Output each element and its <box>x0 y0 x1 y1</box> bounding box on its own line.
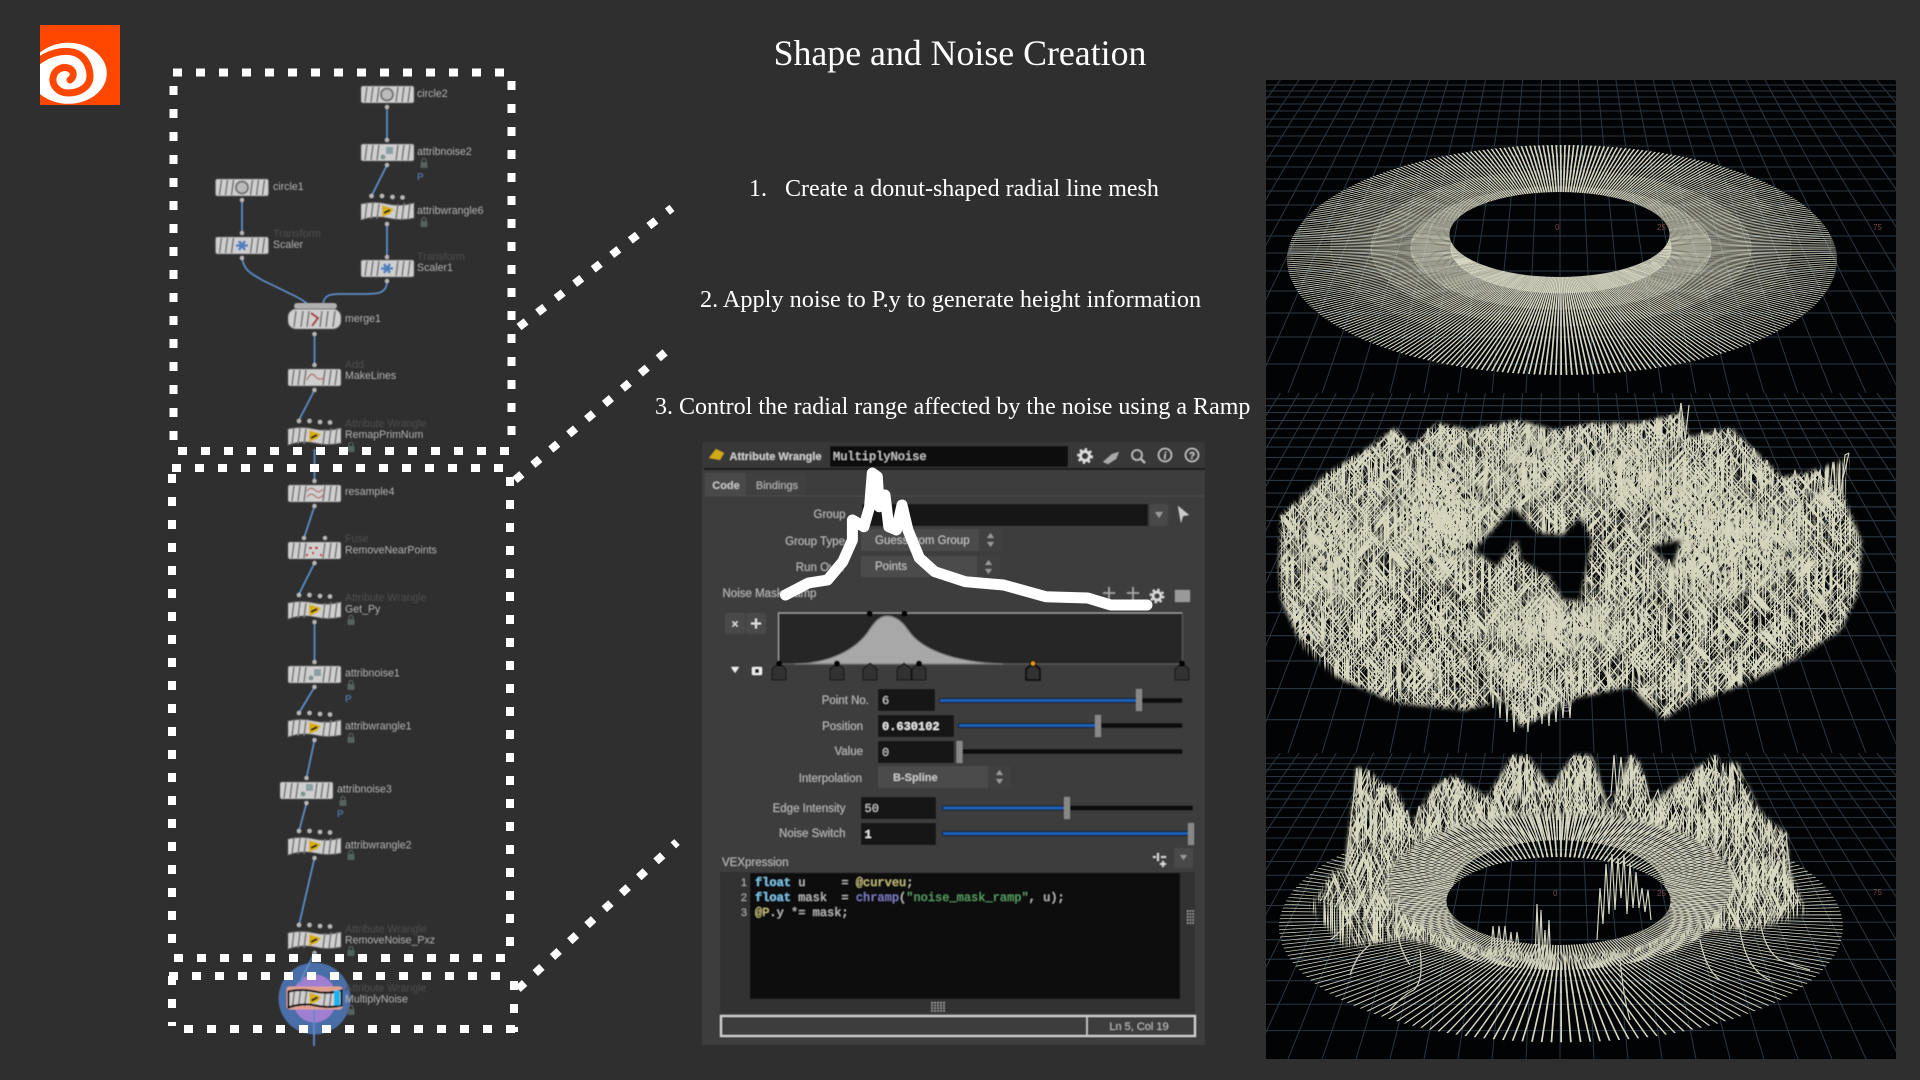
interpolation dropdown: Interpolation <box>799 773 862 785</box>
node: attribnoise2: P <box>417 172 424 183</box>
point no slider: 6 <box>882 694 889 708</box>
run over row: Run Over <box>796 562 845 574</box>
node: attribwrangle2 <box>288 829 412 860</box>
noise switch slider: 1 <box>864 828 872 842</box>
vexpression editor: @P.y *= mask; <box>755 906 849 920</box>
header row: ? <box>1189 451 1195 462</box>
vexpression editor: VEXpression <box>722 857 788 869</box>
node: attribnoise2 <box>361 138 472 183</box>
vexpression editor: float u = @curveu; <box>755 876 913 890</box>
node: MultiplyNoise selected: Attribute Wrangle <box>345 982 427 994</box>
dashed connector 2 <box>515 344 675 480</box>
node: attribnoise1: attribnoise1 <box>345 668 400 680</box>
node: attribnoise2: attribnoise2 <box>417 146 472 158</box>
node: attribnoise1 <box>288 660 400 705</box>
position slider <box>822 715 1182 737</box>
panel: viewport backdrop <box>1266 80 1896 1059</box>
group type row <box>785 529 1002 551</box>
value slider: 0 <box>882 746 889 760</box>
viewport: masked noise donut <box>1266 752 1896 1059</box>
viewport: flat donut <box>1266 80 1896 393</box>
viewport: noisy height field: 50 <box>1560 701 1571 713</box>
viewport: flat donut: 0 <box>1555 223 1560 232</box>
tabs: Bindings <box>756 480 799 492</box>
value slider <box>834 741 1182 763</box>
node: attribwrangle1 <box>288 711 412 743</box>
point no slider <box>822 689 1182 711</box>
edge intensity slider: Edge Intensity <box>773 803 846 815</box>
run over row <box>796 556 1000 577</box>
node network <box>216 86 484 1046</box>
dashed connector 3 <box>518 842 677 989</box>
viewport: flat donut: 25 <box>1657 223 1666 232</box>
header row: i <box>1164 451 1167 462</box>
step 2 text: 2. Apply noise to P.y to generate height information <box>700 286 1201 313</box>
viewport: noisy height field <box>1266 393 1896 753</box>
ramp widget: × <box>731 617 739 631</box>
node: RemoveNearPoints <box>288 533 437 565</box>
node: attribnoise3: attribnoise3 <box>337 784 392 796</box>
node: Scaler: Scaler <box>273 239 303 251</box>
viewport: flat donut: 75 <box>1873 223 1882 232</box>
icon: houdini logo <box>40 25 120 105</box>
group row: Group <box>814 509 846 521</box>
node: attribwrangle2: attribwrangle2 <box>345 840 412 852</box>
dashed connector 1 <box>519 208 672 327</box>
noise switch slider: Noise Switch <box>779 828 846 840</box>
node: merge1 <box>288 303 381 336</box>
node: Scaler1: Transform <box>417 251 465 263</box>
viewport: masked noise donut: 75 <box>1873 888 1882 897</box>
header row: Attribute Wrangle <box>730 451 822 463</box>
node: MakeLines: Add <box>345 359 364 371</box>
node: RemoveNoise_Pxz: RemoveNoise_Pxz <box>345 934 435 946</box>
vexpression editor: 3 <box>741 907 747 919</box>
group type row: Group Type <box>785 536 845 548</box>
interpolation dropdown <box>799 766 1011 788</box>
ramp widget <box>725 611 1189 680</box>
vexpression editor: Ln 5, Col 19 <box>1109 1021 1169 1033</box>
interpolation dropdown: B-Spline <box>893 772 938 784</box>
node: circle1 <box>216 179 304 202</box>
dashed box: noise group <box>172 468 510 958</box>
panel: attribute wrangle parameters <box>702 442 1205 1045</box>
step 3 text: 3. Control the radial range affected by the noise using a Ramp <box>655 394 1250 420</box>
node: attribnoise3 <box>280 776 392 820</box>
node: circle2: circle2 <box>417 88 448 100</box>
node: Scaler1 <box>361 251 465 283</box>
edge intensity slider: 50 <box>864 802 879 816</box>
node: resample4: resample4 <box>345 486 395 498</box>
node: circle1: circle1 <box>273 181 304 193</box>
node: Get_Py: Attribute Wrangle <box>345 592 427 604</box>
node: circle2 <box>361 86 448 109</box>
node: RemapPrimNum <box>288 418 427 452</box>
point no slider: Point No. <box>822 695 869 707</box>
node: RemoveNoise_Pxz <box>288 923 435 956</box>
node: RemoveNoise_Pxz: Attribute Wrangle <box>345 924 427 936</box>
title: Shape and Noise Creation <box>774 33 1146 73</box>
node: Get_Py: Get_Py <box>345 604 381 616</box>
node: MultiplyNoise selected: MultiplyNoise <box>345 994 408 1006</box>
tabs: Code <box>712 480 740 492</box>
node: Get_Py <box>288 592 427 625</box>
position slider: 0.630102 <box>882 720 940 734</box>
header row: MultiplyNoise <box>833 450 927 464</box>
node: RemapPrimNum: RemapPrimNum <box>345 429 423 441</box>
node: Scaler1: Scaler1 <box>417 262 453 274</box>
run over row: Points <box>875 561 907 573</box>
node: merge1: merge1 <box>345 313 381 325</box>
node: MakeLines <box>288 359 396 392</box>
node: resample4 <box>288 479 395 508</box>
tabs <box>702 473 1205 496</box>
node: MakeLines: MakeLines <box>345 370 396 382</box>
node: RemoveNearPoints: Fuse <box>345 533 369 545</box>
vexpression editor: 1 <box>741 877 747 889</box>
node: attribwrangle6 <box>361 194 484 227</box>
node: attribnoise3: P <box>337 809 344 820</box>
node: attribwrangle6: attribwrangle6 <box>417 205 484 217</box>
viewport: masked noise donut: 25 <box>1657 889 1666 898</box>
header row <box>702 442 1205 469</box>
value slider: Value <box>834 746 863 758</box>
node: RemapPrimNum: Attribute Wrangle <box>345 418 427 430</box>
noise mask ramp label: Noise Mask Ramp <box>722 588 816 600</box>
noise mask ramp label <box>722 587 1190 602</box>
node: attribwrangle1: attribwrangle1 <box>345 720 412 732</box>
dashed box: shape group <box>173 72 512 451</box>
node: MultiplyNoise selected <box>278 953 427 1046</box>
node: Scaler <box>216 228 321 260</box>
edge intensity slider <box>773 797 1193 819</box>
vexpression editor: float mask = chramp("noise_mask_ramp", u); <box>755 891 1065 905</box>
node: Scaler: Transform <box>273 228 321 240</box>
vexpression editor <box>720 848 1195 1036</box>
noise switch slider <box>779 823 1194 845</box>
group row <box>814 504 1189 526</box>
viewport: masked noise donut: 0 <box>1553 889 1558 898</box>
step 1 text: 1. Create a donut-shaped radial line mesh <box>749 176 1159 202</box>
node: RemoveNearPoints: RemoveNearPoints <box>345 544 437 556</box>
vexpression editor: 2 <box>741 892 747 904</box>
hand-drawn ramp curve <box>785 473 1147 605</box>
position slider: Position <box>822 721 863 733</box>
dashed box: ramp group <box>169 976 517 1032</box>
group type row: Guess from Group <box>875 535 970 547</box>
node: attribnoise1: P <box>345 694 352 705</box>
wires <box>242 107 387 925</box>
